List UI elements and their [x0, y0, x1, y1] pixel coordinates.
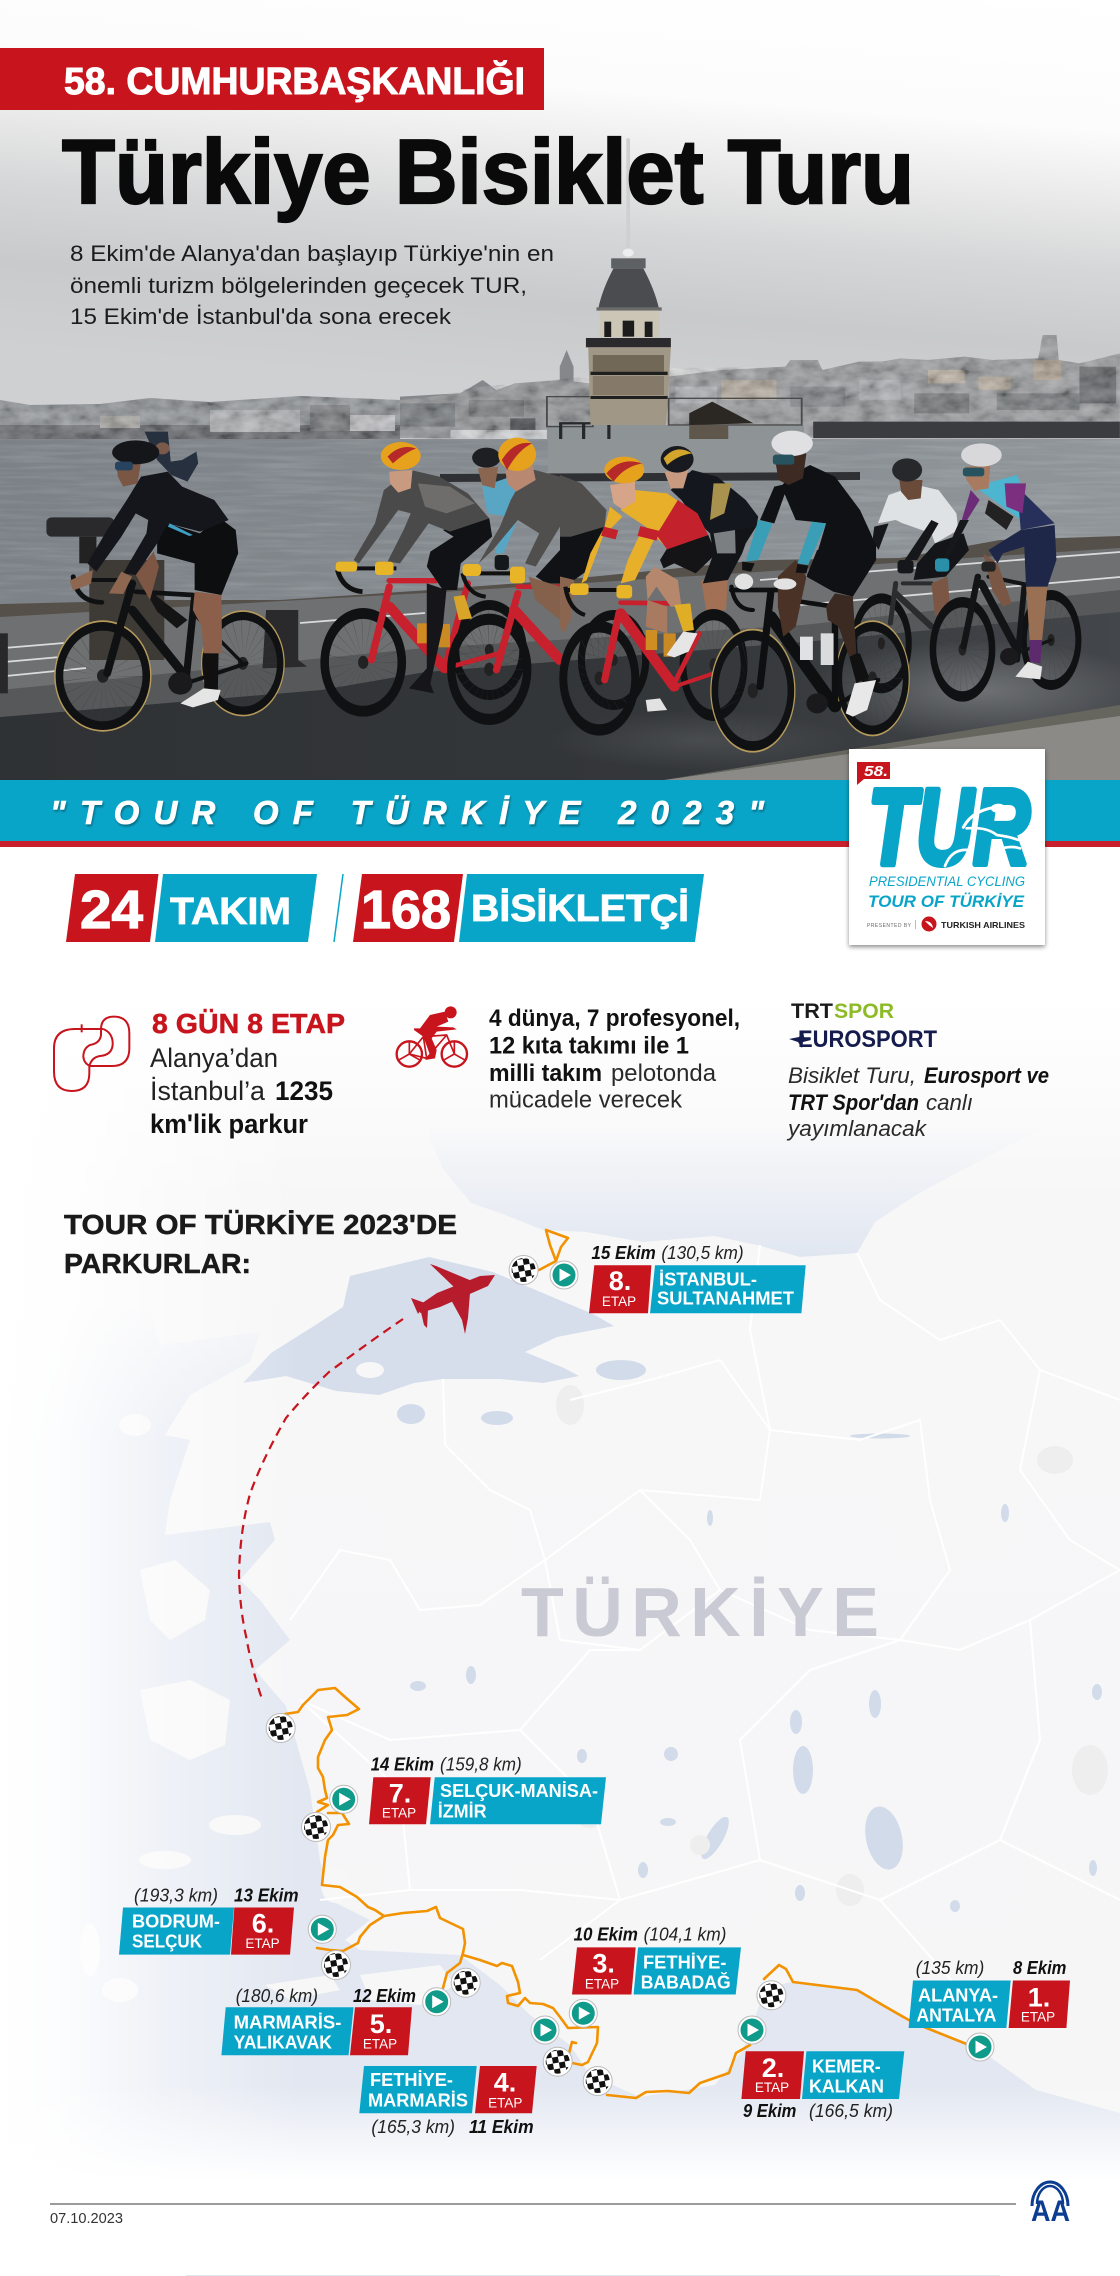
- intro text: 8 Ekim'de Alanya'dan başlayıp Türkiye'nin en: [70, 241, 554, 266]
- rider 6: [661, 446, 758, 612]
- stage 8 label: SULTANAHMET: [657, 1289, 794, 1309]
- text: 12 kıta takımı ile 1: [489, 1032, 689, 1060]
- title: Türkiye Bisiklet Turu: [62, 122, 914, 223]
- rider 9: [933, 443, 1078, 696]
- logo: TRT Spor: TRT: [791, 1000, 833, 1023]
- stage 4 label: 11 Ekim: [469, 2117, 534, 2137]
- race route: [285, 1230, 979, 2098]
- text: 4 dünya, 7 profesyonel,: [489, 1005, 740, 1032]
- rider 4 jacket continued: [560, 475, 606, 537]
- logo cyclist cut-out: [945, 804, 1020, 866]
- stage 6 label: SELÇUK: [132, 1931, 202, 1951]
- rider 3 behind: [472, 448, 523, 570]
- dashed flight path: [239, 1319, 403, 1699]
- stage 3 label: FETHİYE-: [643, 1953, 726, 1973]
- intro text: önemli turizm bölgelerinden geçecek TUR,: [70, 273, 527, 298]
- stage 6 label: BODRUM-: [132, 1911, 220, 1931]
- logo card: TUR: [849, 749, 1045, 945]
- text: [489, 1005, 740, 1114]
- stage 5 label: MARMARİS-: [234, 2012, 341, 2032]
- map heading: PARKURLAR:: [64, 1248, 251, 1279]
- text: mücadele verecek: [489, 1086, 683, 1114]
- stage 3 label: 10 Ekim: [574, 1925, 638, 1945]
- stage 6 label: 6.: [252, 1909, 274, 1939]
- text: canlı: [926, 1090, 973, 1115]
- stage 7 label: [369, 1755, 606, 1824]
- logo badge 58: [857, 762, 890, 785]
- info: teams: [397, 1005, 740, 1114]
- stats: 168 bisikletçi: 168: [361, 880, 451, 940]
- logo wordmark: TUR: [868, 766, 1030, 887]
- stage 6 label: 13 Ekim: [234, 1886, 299, 1906]
- stage 8 label: 15 Ekim: [591, 1243, 656, 1263]
- ribbon text: 58. CUMHURBAŞKANLIĞI: [64, 59, 525, 103]
- stage 3 label: (104,1 km): [644, 1925, 726, 1945]
- text: TRT Spor'dan: [788, 1090, 919, 1115]
- description: İstanbul’a: [150, 1075, 266, 1106]
- stage 2 label: KALKAN: [809, 2076, 884, 2096]
- stage 3 label: 3.: [592, 1949, 615, 1979]
- text: Eurosport ve: [924, 1063, 1049, 1088]
- stage 7 label: ETAP: [382, 1806, 416, 1821]
- description: Alanya’dan: [150, 1043, 278, 1073]
- sponsor line: [867, 916, 1025, 932]
- text: Bisiklet Turu,: [788, 1063, 916, 1088]
- banner: Tour of Türkiye 2023: [0, 780, 1120, 847]
- stage 7 label: İZMİR: [438, 1801, 487, 1821]
- stats: 24 takım: [66, 874, 317, 942]
- stats: 24 takım: TAKIM: [170, 891, 291, 933]
- sponsor line: PRESENTED BY: [867, 923, 912, 929]
- stage 7 label: 7.: [389, 1779, 411, 1809]
- map heading: [64, 1209, 457, 1279]
- stage 5 label: YALIKAVAK: [234, 2032, 332, 2052]
- stage 4 label: [359, 2066, 537, 2137]
- rider 8: [854, 458, 969, 688]
- stage 8 label: İSTANBUL-: [659, 1270, 757, 1290]
- stage 8 label: (130,5 km): [661, 1243, 744, 1263]
- rider 7: [711, 431, 909, 752]
- main title block: [0, 48, 914, 223]
- banner: Tour of Türkiye 2023: "TOUR OF TÜRKİYE 2023": [50, 794, 764, 831]
- header photo: Maiden's Tower and cyclists: [0, 105, 1120, 780]
- stats: 168 bisikletçi: [353, 874, 704, 942]
- start and finish markers: [266, 1256, 994, 2096]
- stage 4 label: 4.: [494, 2068, 516, 2098]
- stage 4 label: FETHİYE-: [370, 2070, 453, 2090]
- stage 1 label: (135 km): [916, 1958, 984, 1978]
- bottom hairline: [186, 2275, 1000, 2276]
- stage 4 label: (165,3 km): [371, 2117, 455, 2137]
- stage 6 label: [119, 1886, 299, 1955]
- stage 4 label: ETAP: [488, 2095, 522, 2110]
- stage 7 label: 14 Ekim: [371, 1755, 434, 1775]
- footer date: 07.10.2023: [50, 2211, 123, 2227]
- intro text: [70, 241, 554, 329]
- stage 5 label: ETAP: [363, 2036, 397, 2051]
- stage 2 label: ETAP: [755, 2080, 789, 2095]
- stage 2 label: KEMER-: [812, 2056, 881, 2076]
- stage 1 label: [909, 1958, 1070, 2028]
- text: [786, 1063, 1049, 1141]
- stage 8 label: 8.: [609, 1266, 631, 1296]
- stage 1 label: ALANYA-: [918, 1985, 998, 2005]
- stage 3 label: ETAP: [585, 1976, 619, 1992]
- stage 5 label: (180,6 km): [236, 1986, 318, 2006]
- stats: 24 takım: 24: [80, 880, 143, 940]
- stage 7 label: (159,8 km): [440, 1755, 522, 1775]
- map heading: TOUR OF TÜRKİYE 2023'DE: [64, 1209, 457, 1240]
- stage 1 label: ANTALYA: [916, 2005, 996, 2025]
- stage 5 label: [221, 1986, 416, 2055]
- icon: cyclist: [397, 1006, 467, 1067]
- stage 1 label: 1.: [1028, 1982, 1050, 2012]
- logo: TRT Spor: [791, 1000, 894, 1023]
- stage 4 label: MARMARİS: [368, 2091, 468, 2111]
- text: milli takım: [489, 1060, 602, 1087]
- logo name: TOUR OF TÜRKİYE: [868, 892, 1025, 911]
- logo: Anadolu Agency: [1031, 2182, 1070, 2228]
- stage 2 label: 2.: [762, 2053, 784, 2083]
- stage 6 label: (193,3 km): [134, 1886, 218, 1906]
- logo: TRT Spor: SPOR: [834, 1000, 894, 1023]
- heading: 8 GÜN 8 ETAP: [152, 1008, 345, 1039]
- stats: 168 bisikletçi: BİSİKLETÇİ: [471, 888, 689, 930]
- logo: Anadolu Agency: AA: [1031, 2195, 1070, 2228]
- stage 3 label: BABADAĞ: [641, 1972, 731, 1992]
- red ribbon: [0, 48, 544, 110]
- stage 1 label: ETAP: [1021, 2009, 1055, 2024]
- stage 5 label: 12 Ekim: [353, 1986, 416, 2006]
- logo subtitle: PRESIDENTIAL CYCLING: [869, 874, 1025, 889]
- rider 1: [55, 440, 284, 731]
- footer rule: [50, 2203, 1016, 2205]
- country label: Türkiye: TÜRKİYE: [521, 1573, 879, 1651]
- rider 4: [451, 438, 560, 719]
- description: [150, 1043, 333, 1139]
- logo badge 58: 58.: [864, 763, 888, 780]
- description: 1235: [275, 1076, 333, 1106]
- stage 3 label: [572, 1925, 741, 1994]
- stage 8 label: [589, 1243, 806, 1313]
- text: pelotonda: [611, 1060, 717, 1087]
- text: yayımlanacak: [786, 1116, 927, 1141]
- stage 8 label: ETAP: [602, 1294, 636, 1309]
- logo: Eurosport: EUROSPORT: [798, 1026, 937, 1053]
- sponsor line: TURKISH AIRLINES: [941, 920, 1025, 930]
- rider 2: [325, 442, 523, 711]
- icon: plane: [411, 1264, 495, 1334]
- stage 1 label: 8 Ekim: [1013, 1958, 1066, 1978]
- rider 5: [563, 457, 744, 730]
- icon: route: [54, 1017, 129, 1091]
- stage 7 label: SELÇUK-MANİSA-: [440, 1781, 598, 1801]
- stage 2 label: [741, 2051, 904, 2121]
- stage 2 label: (166,5 km): [809, 2101, 893, 2121]
- description: km'lik parkur: [150, 1109, 308, 1139]
- info: broadcasters: [786, 1000, 1049, 1141]
- stage 2 label: 9 Ekim: [743, 2101, 796, 2121]
- info: 8 gün 8 etap: [54, 1008, 345, 1139]
- stage 5 label: 5.: [370, 2009, 392, 2039]
- stage 6 label: ETAP: [245, 1936, 280, 1951]
- intro text: 15 Ekim'de İstanbul'da sona erecek: [70, 304, 452, 329]
- map background: [0, 1000, 1120, 2276]
